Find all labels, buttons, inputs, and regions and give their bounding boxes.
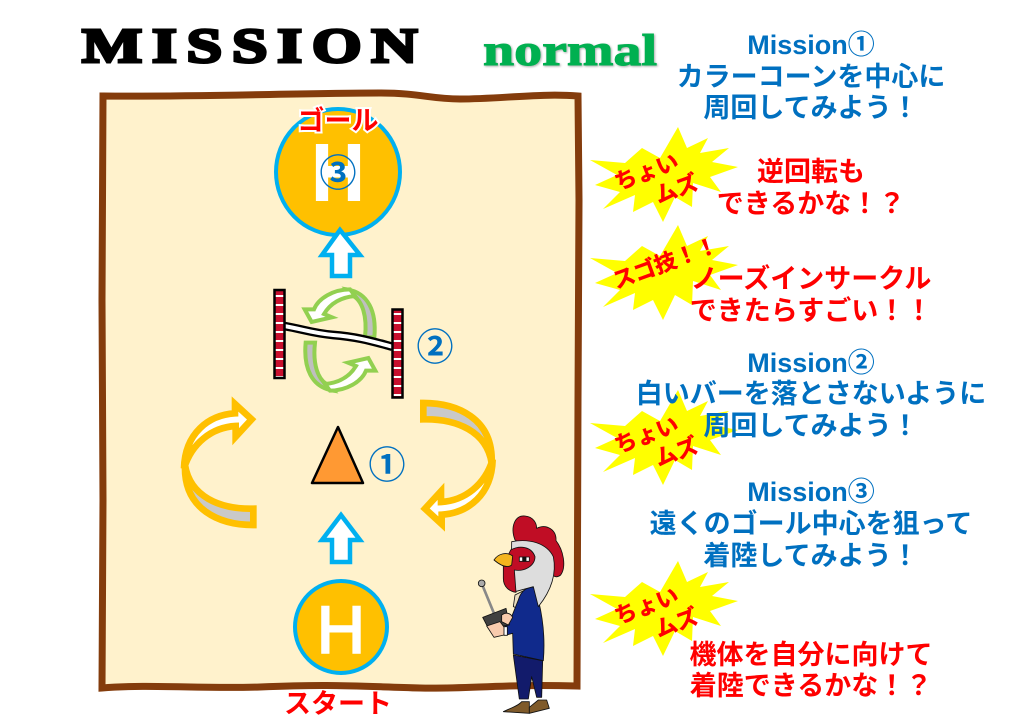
text: mission 1 body: カラーコーンを中心に (677, 62, 945, 92)
burst badge: chotto muzu 1: ちょい (611, 149, 682, 195)
text: landing challenge (690, 640, 932, 701)
goal label: ゴール (298, 105, 378, 136)
start helipad (295, 581, 387, 673)
text: mission 3 (650, 477, 972, 571)
text: nose-in circle challenge: ノーズインサークル (691, 263, 931, 294)
left pole (274, 290, 284, 378)
number 3: ③ (320, 143, 356, 197)
panel: course map (102, 93, 579, 688)
text: mission 1 body (677, 62, 945, 123)
goal helipad (276, 109, 400, 235)
white bar (284, 326, 392, 347)
right loop arrows (423, 403, 493, 524)
burst badge: chotto muzu 3: ちょい (611, 583, 682, 629)
burst badge: chotto muzu 3: ムズ (651, 604, 701, 642)
text: mission 2 (636, 348, 986, 441)
start helipad: H (317, 593, 365, 668)
character: rooster pilot with controller (478, 516, 564, 713)
text: landing challenge: 機体を自分に向けて (690, 640, 932, 670)
burst badge: chotto muzu 2: ムズ (651, 433, 701, 471)
arrow: to goal (322, 230, 360, 276)
title: MISSION: MISSION (82, 19, 417, 73)
number 2: ② (416, 317, 454, 371)
text: mission 1 body: 周回してみよう！ (703, 93, 919, 123)
text: landing challenge: 着陸できるかな！？ (690, 671, 932, 701)
burst badge: chotto muzu 2: ちょい (611, 412, 682, 458)
right pole (392, 310, 402, 398)
text: mission 2: 周回してみよう！ (703, 411, 919, 441)
text: reverse rotation challenge (717, 157, 905, 219)
text: reverse rotation challenge: できるかな！？ (717, 189, 905, 219)
text: mission 3: 着陸してみよう！ (703, 541, 919, 571)
burst badge: chotto muzu 3 (590, 561, 738, 656)
left loop arrows (184, 404, 253, 525)
burst badge: chotto muzu 1 (590, 127, 738, 222)
gate with looping arrows (284, 289, 392, 391)
goal helipad: H (312, 129, 364, 218)
burst badge: sugo-waza: スゴ技！！ (609, 232, 721, 294)
burst badge: chotto muzu 1: ムズ (651, 170, 701, 208)
number 1: ① (368, 435, 406, 489)
burst badge: chotto muzu 2 (590, 390, 738, 485)
circling arrows around cone (184, 403, 493, 525)
text: mission 3: Mission③ (747, 477, 875, 507)
green loop arrows (305, 289, 375, 391)
text: mission 1: Mission① (747, 30, 875, 60)
text: nose-in circle challenge (690, 263, 932, 326)
start label: スタート (284, 689, 392, 719)
arrow: from start (322, 515, 360, 562)
burst badge: sugo-waza (590, 225, 738, 320)
text: nose-in circle challenge: できたらすごい！！ (690, 295, 932, 326)
text: mission 2: Mission② (747, 348, 875, 378)
level label: normal: normal (483, 26, 657, 75)
text: mission 3: 遠くのゴール中心を狙って (650, 508, 972, 539)
cone (312, 427, 363, 483)
text: reverse rotation challenge: 逆回転も (757, 157, 865, 187)
text: mission 2: 白いバーを落とさないように (636, 379, 986, 409)
